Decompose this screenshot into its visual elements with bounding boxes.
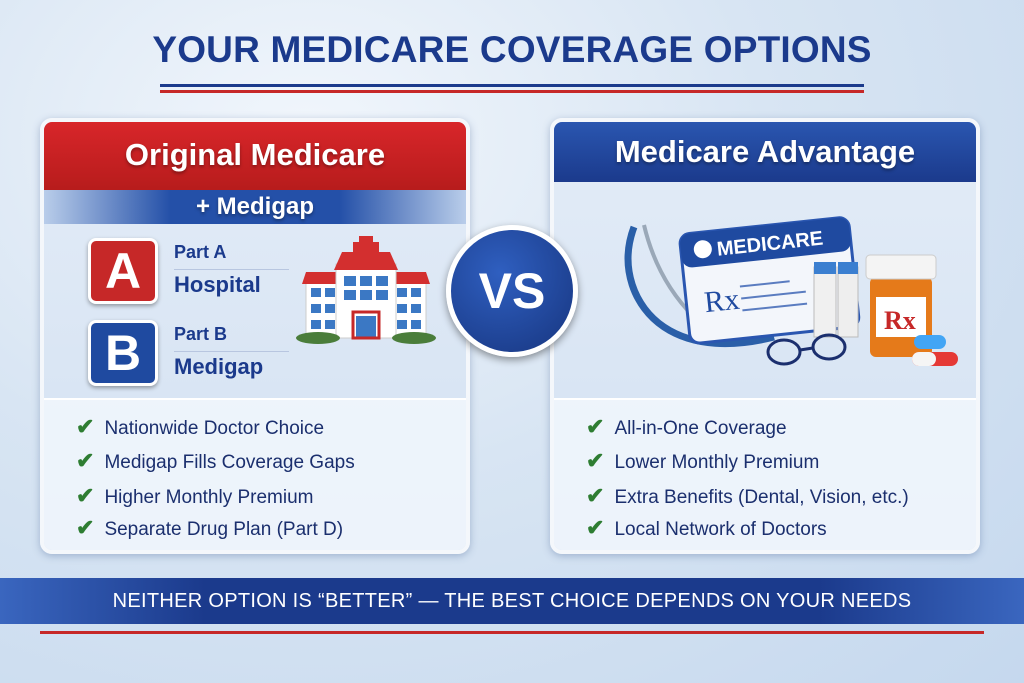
panel: original medicare xyxy=(40,118,470,554)
header: medicare advantage: Medicare Advantage xyxy=(615,134,915,169)
header: original medicare xyxy=(44,122,466,190)
part B icon xyxy=(88,320,158,386)
list: advantage features: ✔ Lower Monthly Premium xyxy=(586,448,819,473)
part B icon: B xyxy=(105,325,141,381)
part A text: Hospital xyxy=(174,272,261,297)
part A text xyxy=(174,242,289,297)
illustration: medicare card, stethoscope, pills: Rx xyxy=(884,306,916,335)
panel: medicare advantage xyxy=(550,118,980,554)
banner red line xyxy=(40,631,984,634)
header: medicare advantage xyxy=(554,122,976,182)
list: original medicare features: ✔ Higher Monthly Premium xyxy=(76,483,314,508)
list: original medicare features: ✔ Medigap Fills Coverage Gaps xyxy=(76,448,355,473)
list: original medicare features: ✔ Separate Drug Plan (Part D) xyxy=(76,515,343,540)
title underline xyxy=(160,84,864,93)
part B text: Part B xyxy=(174,324,227,344)
list: original medicare features xyxy=(44,398,466,558)
illustration: medicare card, stethoscope, pills xyxy=(624,216,958,366)
part B text: Medigap xyxy=(174,354,263,379)
part A icon xyxy=(88,238,158,304)
VS badge xyxy=(446,225,578,357)
bottom banner: NEITHER OPTION IS “BETTER” — THE BEST CHOICE DEPENDS ON YOUR NEEDS xyxy=(113,590,911,612)
illustration: medicare card, stethoscope, pills: Rx xyxy=(703,283,741,319)
part A text: Part A xyxy=(174,242,226,262)
VS badge: VS xyxy=(479,263,545,319)
subheader: medigap: + Medigap xyxy=(196,193,314,220)
title: YOUR MEDICARE COVERAGE OPTIONS xyxy=(152,29,872,70)
list: advantage features: ✔ All-in-One Coverage xyxy=(586,414,787,439)
list: advantage features xyxy=(554,398,976,558)
list: advantage features: ✔ Extra Benefits (Dental, Vision, etc.) xyxy=(586,483,909,508)
illustration: medicare card, stethoscope, pills: MEDICARE xyxy=(716,228,824,261)
icon: hospital xyxy=(296,236,436,344)
part B text xyxy=(174,324,289,379)
list: original medicare features: ✔ Nationwide Doctor Choice xyxy=(76,414,324,439)
list: advantage features: ✔ Local Network of Doctors xyxy=(586,515,827,540)
bottom banner xyxy=(0,578,1024,624)
part A icon: A xyxy=(105,243,141,299)
header: original medicare: Original Medicare xyxy=(125,137,385,172)
subheader: medigap xyxy=(44,190,466,224)
